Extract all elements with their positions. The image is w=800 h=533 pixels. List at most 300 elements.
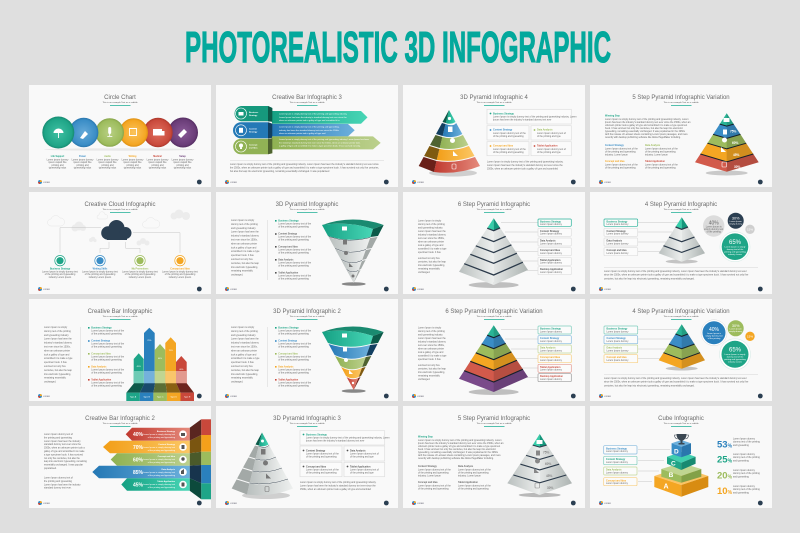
- left text column: text ever since the 1500s,: [44, 346, 71, 348]
- text block: book. It has survived not only five centuries, but also the leap into electronic: [418, 448, 497, 451]
- node: my promotions: My Promotions: [132, 268, 149, 270]
- text block: [418, 436, 504, 460]
- bubble: 65%: dummy text of the: [727, 248, 744, 251]
- panel: creative cloud infographic: [29, 192, 211, 294]
- bar text: Lorem Ipsum is simply dummy text of the printing and typesetting industry. Lorem Ipsum has been: [279, 138, 370, 141]
- box: business strategy: [604, 446, 637, 454]
- footer logo: LOREM: [43, 396, 50, 398]
- text block: typesetting, remaining essentially unchanged. It was popularised in the 1960s: [605, 130, 686, 133]
- node: writing skills: Writing Skills: [93, 268, 108, 270]
- arrow: 70%: 70%: [133, 445, 144, 451]
- bar text: when an unknown printer took a galley of type and scrambled it to.: [279, 119, 340, 122]
- pyramid icons and percentages: 75%: [543, 450, 550, 454]
- box: business strategy: [604, 219, 638, 226]
- bar: blue: [233, 122, 355, 138]
- box: business strategy: [538, 219, 571, 226]
- footer logo: LOREM: [417, 182, 424, 184]
- cube tier C: [667, 452, 696, 470]
- list items: Lorem Ipsum dummy text of the: [418, 468, 451, 471]
- column text: ipsum capsid fine: [98, 162, 117, 164]
- pyramid icons: [448, 117, 458, 169]
- left text column: unchanged.: [231, 275, 244, 277]
- panel: 5 step pyramid infographic: [403, 406, 585, 508]
- box: concept and idea: [604, 355, 638, 363]
- list: of the printing and typesetting: [278, 358, 310, 362]
- bar: teal: Strategy: [249, 114, 258, 117]
- box: desktop application: Lorem Ipsum dummy: [540, 271, 563, 274]
- box: data analysis: [531, 126, 571, 140]
- paragraph: the 1500s, when an unknown printer took a galley of type and scrambled it to make a type specimen book. It has survived not only five centuries,: [230, 166, 379, 170]
- left text: when an unknown printer: [418, 240, 444, 244]
- footer logo: [225, 394, 237, 398]
- box: tablet application: [531, 142, 571, 156]
- perspective base: [126, 383, 194, 393]
- pyramid: [507, 434, 572, 497]
- bubble: 40%: of the printing: [707, 230, 721, 234]
- column text: typesetting indus: [149, 167, 167, 170]
- bar text: [279, 112, 370, 148]
- list: of the printing and typesetting: [91, 384, 123, 388]
- pyramid: [232, 432, 293, 499]
- left text: took a galley of type and: [418, 351, 444, 354]
- heading: 6 Step Pyramid Infographic: [458, 202, 530, 208]
- left text: scrambled it to make a type: [418, 248, 447, 250]
- box: business strategy: Business Strategy: [540, 220, 562, 223]
- heading: 3D Pyramid Infographic 3: [273, 416, 342, 422]
- list: Content Strategy: [91, 340, 111, 343]
- footer logo: LOREM: [604, 396, 611, 398]
- left text column: remaining essentially: [231, 377, 254, 380]
- box: concept and idea: [538, 355, 571, 363]
- pyramid: [659, 217, 705, 264]
- page dot: [571, 501, 576, 505]
- paragraph: [487, 160, 564, 170]
- left text: dummy text of the printing: [418, 223, 445, 226]
- left text: the printing and typesetting: [44, 436, 73, 439]
- box: business strategy: Ipsum has been the industry's standard dummy text ever: [306, 440, 365, 442]
- stat: 53%: and typesetting: [733, 444, 749, 447]
- subtitle: This is an example Text as a subtitle: [663, 422, 699, 425]
- left text column: took a galley of type and: [44, 353, 70, 356]
- funnel top icon: [342, 226, 347, 230]
- cube tier A: A: [663, 484, 669, 490]
- subtitle: This is an example Text as a subtitle: [289, 422, 325, 425]
- stat: 10%: [717, 485, 760, 497]
- stat: 10%: and typesetting: [733, 491, 749, 494]
- box: business strategy: [487, 109, 577, 124]
- bubble: 30%: [728, 320, 744, 336]
- arrow: 45%: 45%: [133, 482, 144, 488]
- pyramid icons and percentages: 45%: [733, 153, 740, 157]
- left text column: Lorem Ipsum has been the: [44, 338, 72, 341]
- footer logo: [412, 180, 424, 184]
- bar: teal: [235, 106, 368, 124]
- bubble: 40%: simply dummy text: [704, 228, 724, 231]
- left text column: and typesetting industry.: [231, 334, 256, 337]
- box: concept and idea: Lorem Ipsum dummy text of the: [493, 148, 526, 151]
- heading: Cube Infographic: [658, 416, 704, 422]
- panel: 3d pyramid infographic 3: [216, 406, 398, 508]
- left text: remaining essentially: [418, 268, 441, 270]
- left text column: scrambled it to make a type: [231, 250, 260, 253]
- paragraph: [604, 377, 749, 387]
- bubble: 65%: [720, 232, 750, 262]
- bar: green: Concept: [249, 144, 257, 146]
- bar text: Lorem Ipsum is simply dummy text of the printing and typesetting.: [279, 126, 340, 128]
- list items: [418, 465, 491, 490]
- paragraph: Lorem Ipsum is simply dummy text of the printing and typesetting industry.: [300, 481, 377, 484]
- left text: centuries, but also the leap: [418, 260, 447, 264]
- box: concept and idea: Concept and Idea: [606, 479, 627, 482]
- column text: printing and: [176, 164, 189, 167]
- column text: printing and: [51, 164, 64, 167]
- column labels: Setup: [179, 155, 186, 158]
- bar chart: upward arrows: [134, 328, 187, 383]
- stat: 10%: Lorem Ipsum dummy: [733, 485, 756, 488]
- list items: of the printing and typesetting: [458, 487, 489, 490]
- left text: standard dummy text ever.: [44, 487, 72, 490]
- bubble: 40%: of the printing: [708, 337, 721, 340]
- pyramid icons and percentages: 60%: [545, 462, 552, 466]
- subtitle: This is an example Text as a subtitle: [289, 315, 325, 318]
- list: Business Strategy: [278, 326, 299, 330]
- text block: with the release of Letraset sheets containing Lorem Ipsum passages, and more: [418, 454, 501, 457]
- left text: centuries, but also the leap: [418, 368, 447, 370]
- list items: Lorem Ipsum dummy text of the: [458, 468, 491, 471]
- paragraph: Lorem Ipsum has been the industry's standard dummy text ever since the: [487, 164, 563, 167]
- paragraph: Lorem Ipsum is simply dummy text of the printing and typesetting industry.: [487, 160, 564, 164]
- box: business strategy: [300, 431, 390, 445]
- text block: Winning Step: [418, 436, 433, 438]
- box: content strategy: [300, 446, 342, 461]
- cube tier D: D: [674, 448, 679, 456]
- text block: [605, 114, 691, 139]
- node: business strategy: Business Strategy: [50, 268, 71, 270]
- subtitle: This is an example Text as a subtitle: [102, 315, 138, 318]
- left text column: specimen book. It has: [231, 254, 254, 257]
- bar text: industry has been the standard dummy text ever since the 1500s.: [279, 129, 340, 132]
- type tabs: Type D: [170, 396, 177, 398]
- left text: Lorem Ipsum has been the industry: [44, 483, 81, 486]
- subtitle: This is an example Text as a subtitle: [663, 101, 699, 104]
- left text: industry's standard dummy: [418, 340, 447, 344]
- panel: 4 step pyramid infographic variation: [590, 299, 772, 401]
- box: business strategy: Lorem Ipsum dummy: [540, 223, 563, 226]
- box: data analysis: [604, 238, 638, 246]
- subtitle: This is an example Text as a subtitle: [102, 101, 138, 104]
- heading: Creative Bar Infographic 2: [85, 416, 156, 422]
- left text: Lorem Ipsum dummy text of: [44, 433, 73, 436]
- left text column: when an unknown printer: [231, 242, 257, 245]
- arrow: 45%: [121, 478, 190, 491]
- paragraph: centuries, but also the leap into electronic typesetting, remaining essentially unchanged.: [604, 384, 695, 387]
- arrow: 70%: of the printing and typesetting: [148, 449, 176, 452]
- footer logo: [38, 180, 50, 184]
- box: concept and idea: Lorem Ipsum dummy text of the: [306, 468, 339, 472]
- box: concept and idea: Concept and Idea: [540, 249, 561, 252]
- list items: Data Analysis: [458, 465, 474, 468]
- list items: Lorem Ipsum dummy text of the: [645, 163, 678, 166]
- box: data analysis: Data Analysis: [540, 240, 556, 242]
- node: my promotions: industry Lorem Ipsum: [129, 276, 151, 279]
- box: content strategy: Lorem Ipsum dummy: [606, 461, 629, 464]
- subtitle: This is an example Text as a subtitle: [102, 208, 138, 211]
- pyramid: [659, 324, 705, 370]
- box: content strategy: Content Strategy: [606, 337, 626, 340]
- bubble: 65%: printing and typesetting: [724, 250, 747, 254]
- column text: printing and: [126, 164, 139, 167]
- stat: 53%: dummy text of the printing: [733, 441, 760, 444]
- page dot: [758, 394, 763, 398]
- bubble: 30%: simply dummy: [729, 224, 743, 226]
- left text column: dummy text of the printing: [44, 330, 71, 333]
- box: data analysis: Data Analysis: [606, 469, 622, 472]
- left text column: scrambled it to make a type: [44, 357, 73, 360]
- left text column: Lorem Ipsum is simply: [231, 219, 255, 222]
- left text: industry's standard dummy: [418, 234, 447, 236]
- bubble: 30%: simply dummy: [729, 331, 743, 333]
- list items: industry. Lorem Ipsum: [418, 474, 441, 477]
- connectors: [638, 330, 678, 358]
- arrow: 85%: [92, 466, 190, 478]
- box: data analysis: [604, 467, 637, 475]
- stat: 20%: Lorem Ipsum dummy: [733, 469, 756, 472]
- column text: typesetting indus: [49, 167, 67, 170]
- list: of the printing and typesetting: [91, 372, 123, 374]
- left text: standard dummy text ever since the: [44, 443, 82, 446]
- left text column: remaining essentially: [44, 377, 67, 380]
- box: data analysis: [604, 345, 638, 353]
- box: content strategy: [538, 336, 571, 344]
- left text column: into electronic typesetting,: [231, 373, 258, 376]
- box: content strategy: Content Strategy: [606, 458, 626, 461]
- column text: Lorem ipsum dummy: [47, 160, 68, 162]
- bubble: 40%: simply dummy text: [705, 334, 723, 338]
- paragraph: [230, 163, 379, 173]
- arrow: 85%: 85%: [133, 470, 144, 476]
- funnel pyramid: [322, 220, 384, 286]
- box: content strategy: Content Strategy: [306, 449, 326, 452]
- arrow: 70%: Content Strategy: [158, 443, 176, 446]
- text block: unknown printer took a galley of type and scrambled it to make a type specimen: [418, 445, 501, 448]
- page dot: [758, 501, 763, 505]
- left text column: centuries, but also the leap: [231, 262, 260, 265]
- arrow: 40%: [126, 428, 190, 441]
- box: business strategy: Lorem Ipsum dummy: [606, 450, 629, 453]
- box: content strategy: Content Strategy: [540, 337, 560, 340]
- column labels: Audio: [104, 155, 111, 158]
- footer logo: [599, 501, 611, 505]
- left text: the printing and typesetting: [44, 480, 73, 483]
- pyramid icons and percentages: 60%: [732, 141, 739, 145]
- list: of the printing and typesetting: [278, 384, 310, 388]
- panel: 6 step pyramid infographic variation: [403, 299, 585, 401]
- list: Lorem Ipsum dummy text of the: [278, 262, 312, 264]
- left text column: centuries, but also the leap: [44, 369, 73, 372]
- list: of the printing and typesetting: [91, 358, 123, 362]
- box: desktop application: Lorem Ipsum dummy: [540, 378, 563, 381]
- connectors: [501, 330, 538, 378]
- left text column: Lorem Ipsum is simply: [44, 326, 68, 329]
- box: concept and idea: Concept and Idea: [606, 249, 627, 252]
- footer logo: LOREM: [230, 503, 237, 505]
- box: content strategy: Lorem Ipsum dummy text of the: [306, 452, 339, 456]
- box: content strategy: Content Strategy: [540, 230, 560, 233]
- list items: Lorem Ipsum dummy text of the: [645, 147, 678, 150]
- footer logo: LOREM: [43, 503, 50, 505]
- left text column: into electronic typesetting,: [44, 373, 71, 376]
- text block: typesetting, remaining essentially unchanged. It was popularised in the 1960s: [418, 451, 499, 454]
- text block: recently with desktop publishing software like Aldus PageMaker including.: [418, 457, 494, 460]
- box: content strategy: [538, 228, 571, 236]
- list: of the printing and typesetting: [278, 226, 310, 228]
- panel: creative bar infographic 3: [216, 85, 398, 187]
- page dot: [571, 180, 576, 184]
- left text: essentially unchanged. It was popular: [44, 464, 83, 467]
- bar: blue: Content: [249, 128, 257, 130]
- left text: leap into electronic typesetting, remaining: [44, 460, 88, 463]
- left text: and typesetting industry.: [418, 226, 443, 230]
- left text: Lorem Ipsum dummy text of: [44, 476, 73, 480]
- box: business strategy: Lorem Ipsum dummy: [606, 330, 629, 333]
- box: tablet application: Tablet Application: [350, 465, 371, 468]
- left text column: and typesetting industry.: [44, 334, 69, 337]
- left text column: survived not only five: [231, 258, 253, 261]
- list items: Data Analysis: [645, 144, 661, 147]
- bubble: 40%: Lorem Ipsum is: [707, 332, 721, 335]
- text block: unknown printer took a galley of type and scrambled it to make a type specimen: [605, 124, 688, 127]
- list items: of the printing and typesetting: [645, 166, 676, 169]
- page dot: [384, 394, 389, 398]
- list: Lorem Ipsum dummy text of the: [91, 368, 125, 372]
- node: writing skills: [82, 256, 118, 279]
- box: business strategy: Business Strategy: [606, 447, 628, 450]
- funnel pyramid: [322, 326, 384, 393]
- bar text: the industry's standard dummy text ever since the 1500s, when an unknown printer took.: [279, 141, 361, 144]
- arrow: 70%: Lorem Ipsum is simply dummy text: [143, 446, 175, 449]
- list items: of the printing and typesetting: [418, 471, 449, 474]
- connectors: [60, 228, 180, 253]
- panel: 5 step pyramid infographic variation: [590, 85, 772, 187]
- text block: Lorem Ipsum is simply dummy text of the printing and typesetting industry. Lorem: [418, 439, 502, 442]
- pyramid icons and percentages: 75%: [730, 130, 737, 134]
- footer logo: [38, 501, 50, 505]
- list items: Tablet Application: [458, 481, 478, 484]
- bar text: a galley of type and scrambled it to make a type specimen book. It has survived not only.: [279, 145, 361, 148]
- footer logo: [599, 287, 611, 291]
- box: data analysis: [538, 345, 571, 353]
- text block: Ipsum has been the industry's standard dummy text ever since the 1500s, when an: [418, 442, 504, 445]
- box: desktop application: Desktop Application: [540, 268, 564, 271]
- box: content strategy: of the printing and typesetting: [493, 135, 524, 138]
- arrow percentages: 45%: [137, 366, 141, 368]
- type tabs: Type B: [143, 396, 150, 398]
- bar: teal: Business: [249, 112, 258, 114]
- box: content strategy: Content Strategy: [606, 230, 626, 233]
- left text: text ever since the 1500s,: [418, 344, 445, 347]
- stat: 53%: [717, 438, 760, 450]
- box: data analysis: Lorem Ipsum dummy: [540, 349, 563, 352]
- funnel icons: [342, 334, 354, 384]
- box: data analysis: [538, 238, 571, 246]
- column text: ipsum capsid fine: [74, 162, 92, 164]
- column text: Lorem ipsum dummy: [122, 160, 143, 162]
- list: [88, 326, 125, 388]
- node: writing skills: industry Lorem Ipsum: [89, 276, 111, 279]
- list: of the printing and typesetting: [278, 278, 310, 280]
- box: data analysis: Data Analysis: [606, 240, 623, 242]
- list: Lorem Ipsum dummy text of the: [278, 382, 312, 384]
- bar text: Lorem Ipsum is simply dummy text of the printing and typesetting industry.: [279, 112, 348, 116]
- box: tablet application: Tablet Application: [537, 145, 558, 148]
- text block: recently with desktop publishing software like Aldus PageMaker including.: [605, 136, 681, 139]
- box: data analysis: Data Analysis: [537, 129, 553, 132]
- box: concept and idea: Lorem Ipsum dummy: [606, 252, 629, 255]
- arrow: 85%: of the printing and typesetting: [148, 474, 176, 477]
- footer logo: LOREM: [417, 396, 424, 398]
- box: business strategy: Business Strategy: [606, 328, 628, 330]
- box: data analysis: Lorem Ipsum dummy text of: [350, 452, 379, 456]
- heading: 3D Pyramid Infographic 4: [460, 95, 529, 101]
- text block: Ipsum has been the industry's standard dummy text ever since the 1500s, when an: [605, 121, 691, 124]
- right perspective wall: [190, 419, 211, 499]
- list items: Concept and Idea: [418, 481, 438, 484]
- connectors: [501, 222, 538, 270]
- node: business strategy: of the printing and typesetting: [45, 273, 76, 276]
- list items: of the printing and typesetting: [418, 487, 449, 490]
- list: Content Strategy: [278, 233, 298, 236]
- list items: Lorem Ipsum dummy text of the: [418, 484, 451, 487]
- left text column: industry's standard dummy: [231, 235, 260, 238]
- left text column: Lorem Ipsum is simply: [231, 326, 255, 329]
- box: business strategy: Business Strategy: [606, 220, 628, 223]
- bubble: 65%: printing and typesetting: [724, 358, 747, 361]
- list: Lorem Ipsum dummy text of the: [91, 343, 125, 346]
- arrow: 40%: of the printing and typesetting: [148, 436, 176, 439]
- node: business strategy: industry Lorem Ipsum: [49, 276, 71, 279]
- stat: 10%: 10%: [717, 486, 733, 497]
- box: concept and idea: [538, 248, 571, 256]
- stat: 10%: dummy text of the printing: [733, 488, 760, 491]
- list: Tablet Application: [91, 378, 112, 382]
- cube tier A: [654, 467, 708, 497]
- node: writing skills: of the printing and typesetting: [85, 273, 116, 276]
- left text column: dummy text of the printing: [231, 330, 258, 333]
- panel: 3d pyramid infographic 2: [216, 299, 398, 401]
- page dot: [384, 287, 389, 291]
- list: of the printing and typesetting: [278, 252, 310, 254]
- divider: [230, 159, 384, 162]
- footer logo: LOREM: [417, 503, 424, 505]
- footer logo: [225, 180, 237, 184]
- column text: printing and: [151, 164, 164, 167]
- node: my promotions: of the printing and typesetting: [125, 273, 156, 276]
- list: [275, 220, 312, 280]
- panel: 3d pyramid infographic 4: [403, 85, 585, 187]
- box: desktop application: [538, 374, 571, 382]
- bubble: 15%: [745, 225, 755, 234]
- stat: 20%: [717, 469, 760, 481]
- arrow percentages: 60%: [158, 358, 162, 360]
- list items: of the printing and typesetting: [605, 166, 636, 169]
- left text: survived not only five: [418, 257, 440, 260]
- left text: into electronic typesetting,: [418, 371, 445, 374]
- footer logo: [412, 394, 424, 398]
- heading: 4 Step Pyramid Infographic: [645, 202, 717, 208]
- box: tablet application: [538, 364, 571, 372]
- box: tablet application: [344, 462, 385, 477]
- box: concept and idea: of the printing and typesetting: [493, 151, 524, 154]
